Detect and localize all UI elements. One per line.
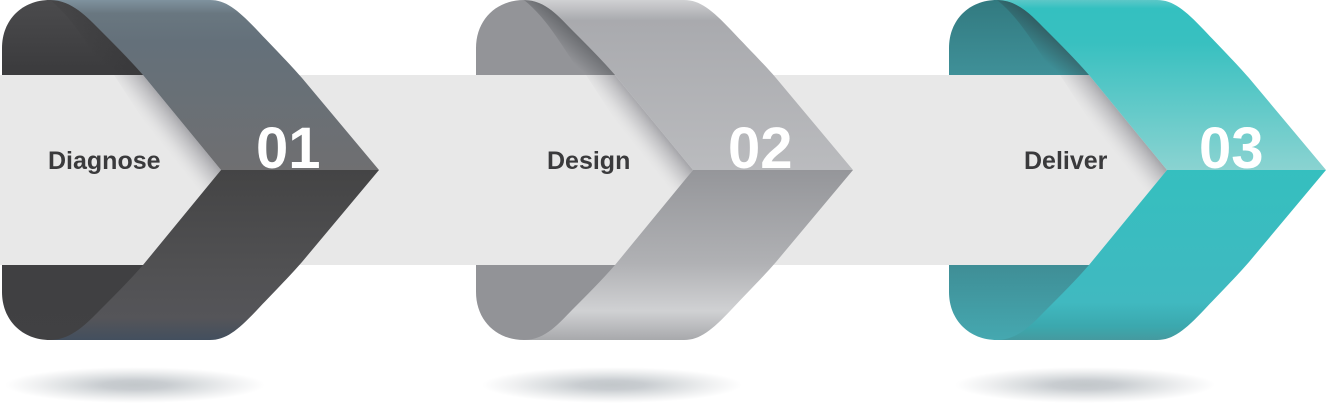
label: Design: Design xyxy=(547,147,630,175)
chevron 1 xyxy=(50,0,379,340)
connecting grey band xyxy=(0,75,1167,265)
label: Diagnose: Diagnose xyxy=(48,147,161,175)
ground shadow 3 xyxy=(955,367,1215,403)
fold shadow 3 xyxy=(997,0,1167,201)
ground shadow 2 xyxy=(482,367,742,403)
number 03: 03 xyxy=(1199,116,1264,181)
chevron 2 xyxy=(524,0,853,340)
label: Deliver: Deliver xyxy=(1024,147,1108,175)
fold shadow 1 xyxy=(50,0,221,201)
chevron 3 xyxy=(997,0,1326,340)
fold shadow 2 xyxy=(524,0,693,201)
back panel 2 xyxy=(476,0,624,340)
ground shadow 1 xyxy=(5,367,265,403)
number 01: 01 xyxy=(256,116,321,181)
back panel 1 xyxy=(2,0,150,340)
back panel 3 xyxy=(949,0,1097,340)
number 02: 02 xyxy=(728,116,793,181)
